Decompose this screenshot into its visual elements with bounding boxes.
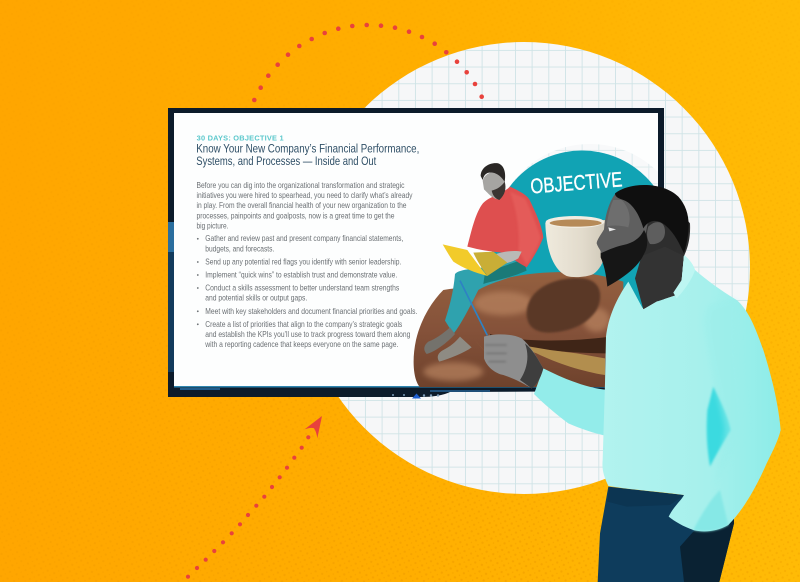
bread highlights [423, 291, 610, 381]
objective label: OBJECTIVE [530, 168, 623, 198]
pen [460, 281, 487, 335]
man presenting [484, 185, 781, 582]
coffee [550, 219, 602, 227]
intro paragraph: Before you can dig into the organizational transformation and strategic [196, 180, 405, 190]
beard [492, 182, 505, 200]
under arm shade [707, 387, 731, 467]
sandwich gap [490, 334, 610, 353]
legs [445, 259, 527, 334]
face [597, 193, 648, 263]
shirt sleeve forearm [534, 368, 610, 437]
slide heading: Know Your New Company’s Financial Performance, [196, 142, 419, 156]
collar edge [673, 255, 695, 298]
ear [647, 222, 665, 244]
bullet list: Gather and review past and present company financial statements, [205, 233, 403, 243]
faint grid halo [512, 144, 658, 184]
intro paragraph: in play. From the overall financial health of your new organization to the [196, 200, 407, 210]
man on laptop [424, 163, 543, 362]
monitor [168, 108, 664, 398]
bullet list: and establish the KPIs you’ll use to track progress toward them along [205, 329, 410, 339]
eye [608, 227, 616, 231]
slide text [196, 133, 419, 349]
bullet list: Implement “quick wins” to establish trust and demonstrate value. [205, 269, 397, 279]
laptop [443, 244, 487, 276]
belt [607, 487, 684, 507]
slide illustration [414, 144, 658, 387]
trousers [598, 487, 734, 582]
head [483, 172, 505, 199]
slide heading: Systems, and Processes — Inside and Out [196, 154, 377, 168]
sleeve shade [703, 300, 747, 490]
shirt highlight [512, 194, 540, 263]
hair [615, 185, 689, 253]
intro paragraph: processes, painpoints and goalposts, now is a great time to get the [196, 210, 395, 220]
monitor control lights [392, 394, 439, 398]
screen bottom edge [174, 386, 658, 388]
monitor screen [174, 113, 658, 387]
thigh shade [483, 259, 527, 284]
wrist shade [520, 343, 543, 388]
bullet list [197, 233, 417, 349]
forearm hand [496, 251, 522, 264]
hand [484, 334, 543, 388]
laptop base [473, 252, 507, 276]
dotted arrow bottom [186, 416, 322, 579]
trouser shade [680, 505, 734, 582]
beard [601, 230, 647, 287]
monitor bezel [168, 108, 664, 397]
hair [481, 163, 505, 182]
bullet list: with a reporting cadence that keeps everyone on the same page. [205, 339, 398, 349]
bullet list: budgets, and forecasts. [205, 243, 274, 253]
bullet list: Create a list of priorities that align to the company’s strategic goals [205, 319, 403, 329]
bread and cup collage [414, 216, 623, 387]
cup shadow on bread [527, 278, 600, 333]
neck [635, 242, 684, 309]
slide heading [196, 142, 419, 168]
sandwich filling [480, 346, 605, 375]
cuff shade [693, 490, 728, 531]
head back [637, 207, 690, 257]
shoes [424, 327, 455, 354]
dotted arc arrow top [252, 23, 484, 102]
bezel blue reflection [168, 222, 490, 392]
bullet list: Send up any potential red flags you identify with senior leadership. [205, 256, 401, 266]
forehead highlight [607, 200, 630, 227]
shirt body [602, 255, 781, 531]
intro paragraph [196, 180, 413, 230]
intro paragraph: big picture. [196, 220, 228, 230]
bullet list: and potential skills or output gaps. [205, 292, 307, 302]
coffee cup [545, 220, 607, 277]
cup rim [546, 216, 604, 228]
intro paragraph: initiatives you were hired to spearhead, you need to clarify what’s already [196, 190, 413, 200]
fingers [485, 345, 507, 362]
white grid circle [298, 42, 750, 494]
red shirt [467, 187, 543, 267]
teal circle [492, 150, 654, 308]
bread [414, 272, 623, 387]
bullet list: Conduct a skills assessment to better understand team strengths [205, 282, 400, 292]
kicker: 30 DAYS: OBJECTIVE 1 [197, 133, 284, 142]
bullet list: Meet with key stakeholders and document financial priorities and goals. [205, 306, 417, 316]
